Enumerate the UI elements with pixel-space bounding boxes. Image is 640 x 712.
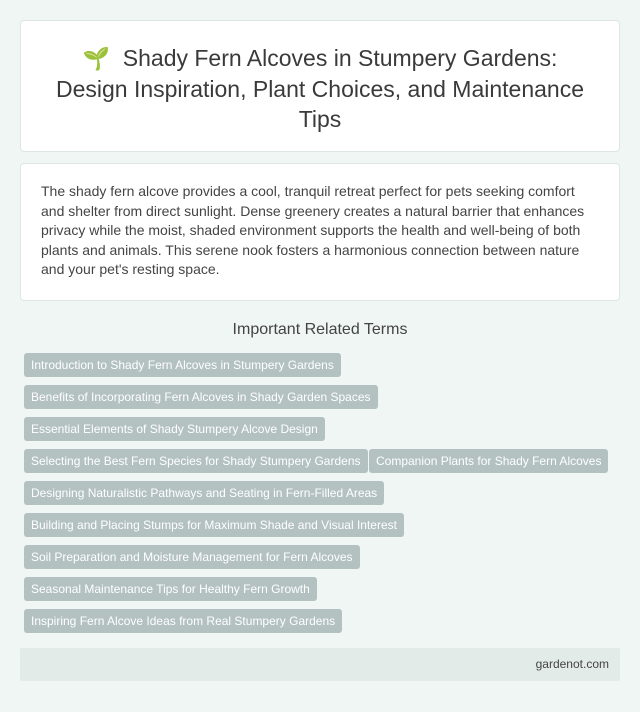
footer source: gardenot.com	[536, 657, 609, 671]
tag	[24, 353, 341, 377]
tag	[24, 385, 378, 409]
tag	[24, 417, 325, 441]
tag: Inspiring Fern Alcove Ideas from Real Stumpery Gardens	[31, 614, 335, 628]
title	[56, 45, 584, 132]
tag: Companion Plants for Shady Fern Alcoves	[376, 454, 601, 468]
tag: Building and Placing Stumps for Maximum Shade and Visual Interest	[31, 518, 397, 532]
section heading: Important Related Terms	[233, 321, 407, 338]
tag: Designing Naturalistic Pathways and Seating in Fern-Filled Areas	[31, 486, 377, 500]
tag: Essential Elements of Shady Stumpery Alcove Design	[31, 422, 318, 436]
tag: Selecting the Best Fern Species for Shady Stumpery Gardens	[31, 454, 361, 468]
header card	[20, 20, 620, 152]
title: Tips	[299, 106, 341, 132]
tag: Soil Preparation and Moisture Management for Fern Alcoves	[31, 550, 352, 564]
tag	[24, 481, 384, 505]
footer	[20, 648, 620, 681]
tag: Introduction to Shady Fern Alcoves in Stumpery Gardens	[31, 358, 334, 372]
tag	[24, 545, 360, 569]
tag	[24, 449, 368, 473]
title: Design Inspiration, Plant Choices, and Maintenance	[56, 76, 584, 102]
title: 🌱 Shady Fern Alcoves in Stumpery Gardens:	[83, 45, 557, 71]
tag	[24, 577, 317, 601]
tag	[369, 449, 608, 473]
description text: The shady fern alcove provides a cool, tranquil retreat perfect for pets seeking comfort and shelter from direct sunlight. Dense greenery creates a natural barrier that enhances privacy while the moist, shaded environment supports the health and well-being of both plants and animals. This serene nook fosters a harmonious connection between nature and your pet's resting space.	[41, 183, 584, 277]
tag	[24, 609, 342, 633]
tag: Benefits of Incorporating Fern Alcoves in Shady Garden Spaces	[31, 390, 371, 404]
description card	[20, 163, 620, 301]
tag: Seasonal Maintenance Tips for Healthy Fern Growth	[31, 582, 310, 596]
tag	[24, 513, 404, 537]
